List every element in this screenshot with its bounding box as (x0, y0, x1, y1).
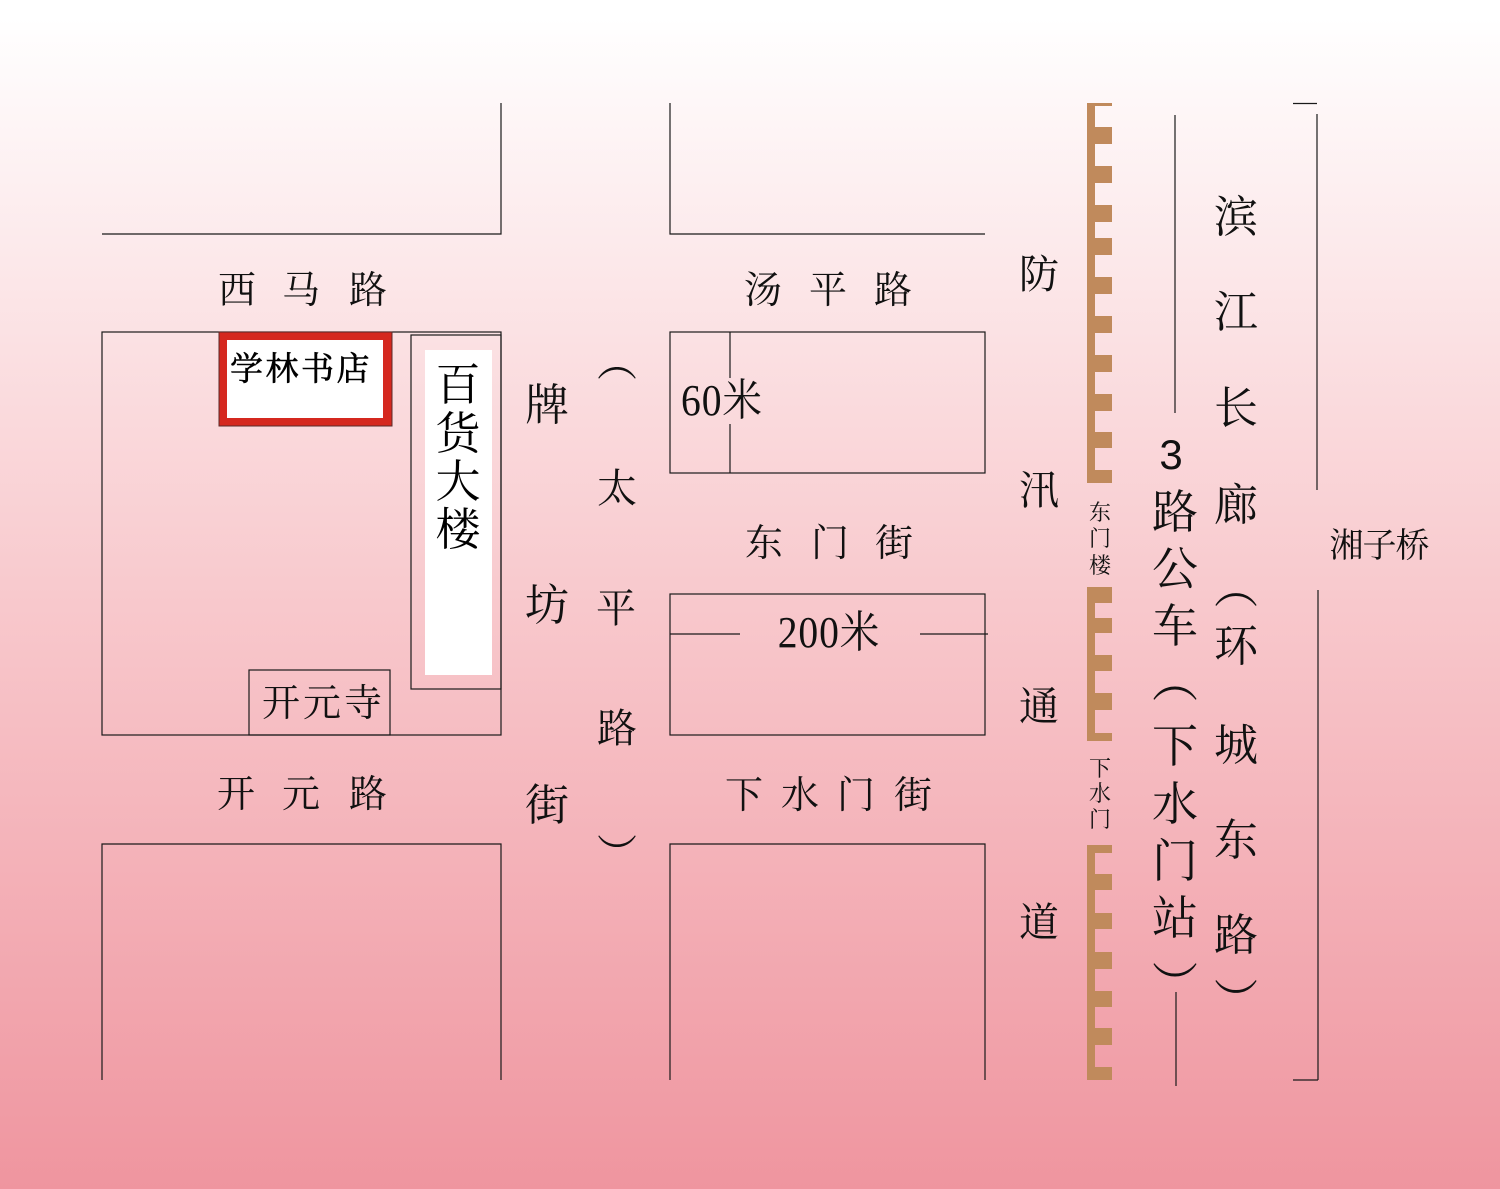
label: bus route 3 to Xiashuimen stop: 下 (1152, 721, 1198, 772)
road label: Tangping Road (744, 270, 912, 312)
road label: Xima Road: 西 (218, 270, 256, 312)
label: bus route 3 to Xiashuimen stop: 车 (1152, 601, 1198, 652)
label: bus route 3 to Xiashuimen stop (1152, 431, 1198, 1011)
road label: Xiashuimen Street: 门 (837, 775, 875, 817)
road label: Kaiyuan Road: 元 (282, 774, 320, 816)
gate label: Xiashuimen: 水 (1089, 781, 1111, 806)
bus route line (1175, 115, 1176, 1086)
road label: Taiping Road: 平 (596, 586, 636, 631)
label: Binjiang promenade: ︶ (1214, 977, 1258, 1026)
label: bus route 3 to Xiashuimen stop: 路 (1152, 487, 1198, 538)
city wall: middle section (1087, 587, 1112, 741)
label: bus route 3 to Xiashuimen stop: ︵ (1152, 656, 1198, 707)
road label: Paifang Street: 街 (525, 781, 569, 830)
gate label: Xiashuimen: 下 (1089, 756, 1111, 781)
road label: Kaiyuan Road (217, 774, 387, 816)
landmark: Kaiyuan temple: 开元寺 (262, 683, 385, 725)
landmark: department store (411, 335, 501, 689)
road label: Xiashuimen Street: 街 (894, 775, 932, 817)
label: bus route 3 to Xiashuimen stop: 站 (1152, 893, 1198, 944)
landmark: Xuelin bookstore (219, 332, 392, 426)
road label: Xiashuimen Street (725, 775, 932, 817)
road label: Dongmen Street: 街 (875, 523, 913, 565)
label: bus route 3 to Xiashuimen stop: ︶ (1152, 960, 1198, 1011)
landmark: department store: 大 (435, 457, 481, 507)
label: Binjiang promenade: 环 (1214, 622, 1260, 671)
road label: Kaiyuan Road: 开 (217, 774, 255, 816)
road label: Taiping Road (596, 340, 637, 877)
block: top right (670, 103, 985, 234)
road label: Tangping Road: 汤 (744, 270, 782, 312)
gate label: Dongmen tower (1089, 500, 1112, 578)
gate label: Dongmen tower: 楼 (1089, 553, 1112, 578)
road label: Taiping Road: ︵ (597, 340, 637, 385)
landmark: Kaiyuan temple (249, 670, 390, 735)
road label: Taiping Road: 太 (597, 466, 637, 511)
label: Xiangzi bridge: 湘子桥 (1330, 527, 1428, 565)
road label: Xima Road: 马 (282, 270, 320, 312)
road label: Tangping Road: 平 (809, 270, 847, 312)
landmark: department store: 百 (435, 360, 481, 410)
road label: Dongmen Street: 东 (745, 523, 783, 565)
landmark: Xuelin bookstore: 学林书店 (230, 351, 372, 388)
road label: Paifang Street (525, 381, 569, 830)
label: Binjiang promenade: 廊 (1214, 481, 1258, 530)
landmark: department store: 楼 (435, 505, 481, 555)
distance label: 200 m: 200米 (778, 609, 880, 658)
road label: Fangxun Passage: 通 (1019, 684, 1059, 729)
road label: Kaiyuan Road: 路 (349, 774, 387, 816)
label: bus route 3 to Xiashuimen stop: 3 (1159, 431, 1183, 478)
road label: Taiping Road: 路 (597, 706, 637, 751)
city wall: upper section (1087, 103, 1112, 483)
label: Binjiang promenade: 滨 (1214, 193, 1258, 242)
river bridge line (1293, 104, 1318, 1080)
road label: Fangxun Passage (1019, 252, 1059, 945)
label: Binjiang promenade: 东 (1214, 816, 1258, 865)
road label: Tangping Road: 路 (874, 270, 912, 312)
gate label: Dongmen tower: 门 (1089, 526, 1111, 551)
block: bottom left (102, 844, 501, 1080)
gate label: Xiashuimen (1089, 756, 1111, 832)
block: lower middle right with 200 m marker (670, 594, 988, 735)
road label: Dongmen Street: 门 (811, 523, 849, 565)
label: Binjiang promenade: 江 (1214, 288, 1258, 337)
label: bus route 3 to Xiashuimen stop: 水 (1152, 779, 1198, 830)
road label: Fangxun Passage: 道 (1019, 900, 1059, 945)
label: Binjiang promenade: 路 (1214, 911, 1258, 960)
road label: Xiashuimen Street: 下 (725, 775, 763, 817)
road label: Xima Road (218, 270, 387, 312)
road label: Dongmen Street (745, 523, 913, 565)
block: middle left (102, 332, 501, 735)
label: bus route 3 to Xiashuimen stop: 门 (1152, 836, 1198, 887)
label: Binjiang promenade: 城 (1214, 721, 1258, 770)
gate label: Dongmen tower: 东 (1089, 500, 1111, 525)
label: bus route 3 to Xiashuimen stop: 公 (1152, 544, 1198, 595)
road label: Fangxun Passage: 防 (1019, 252, 1059, 297)
road label: Xima Road: 路 (349, 270, 387, 312)
block: top left (102, 103, 501, 234)
label: Binjiang promenade: 长 (1214, 384, 1258, 433)
landmark: department store: 货 (435, 409, 483, 459)
road label: Taiping Road: ︶ (597, 832, 637, 877)
road label: Fangxun Passage: 汛 (1019, 468, 1059, 513)
road label: Paifang Street: 牌 (525, 381, 569, 430)
block: upper middle right with 60 m marker (670, 332, 985, 473)
road label: Xiashuimen Street: 水 (781, 775, 819, 817)
distance label: 60 m: 60米 (681, 377, 763, 426)
block: bottom right (670, 844, 985, 1080)
city wall: lower section (1087, 845, 1112, 1080)
label: Binjiang promenade (1214, 193, 1260, 1026)
gate label: Xiashuimen: 门 (1089, 807, 1111, 832)
label: Binjiang promenade: ︵ (1214, 564, 1258, 613)
road label: Paifang Street: 坊 (525, 581, 569, 630)
